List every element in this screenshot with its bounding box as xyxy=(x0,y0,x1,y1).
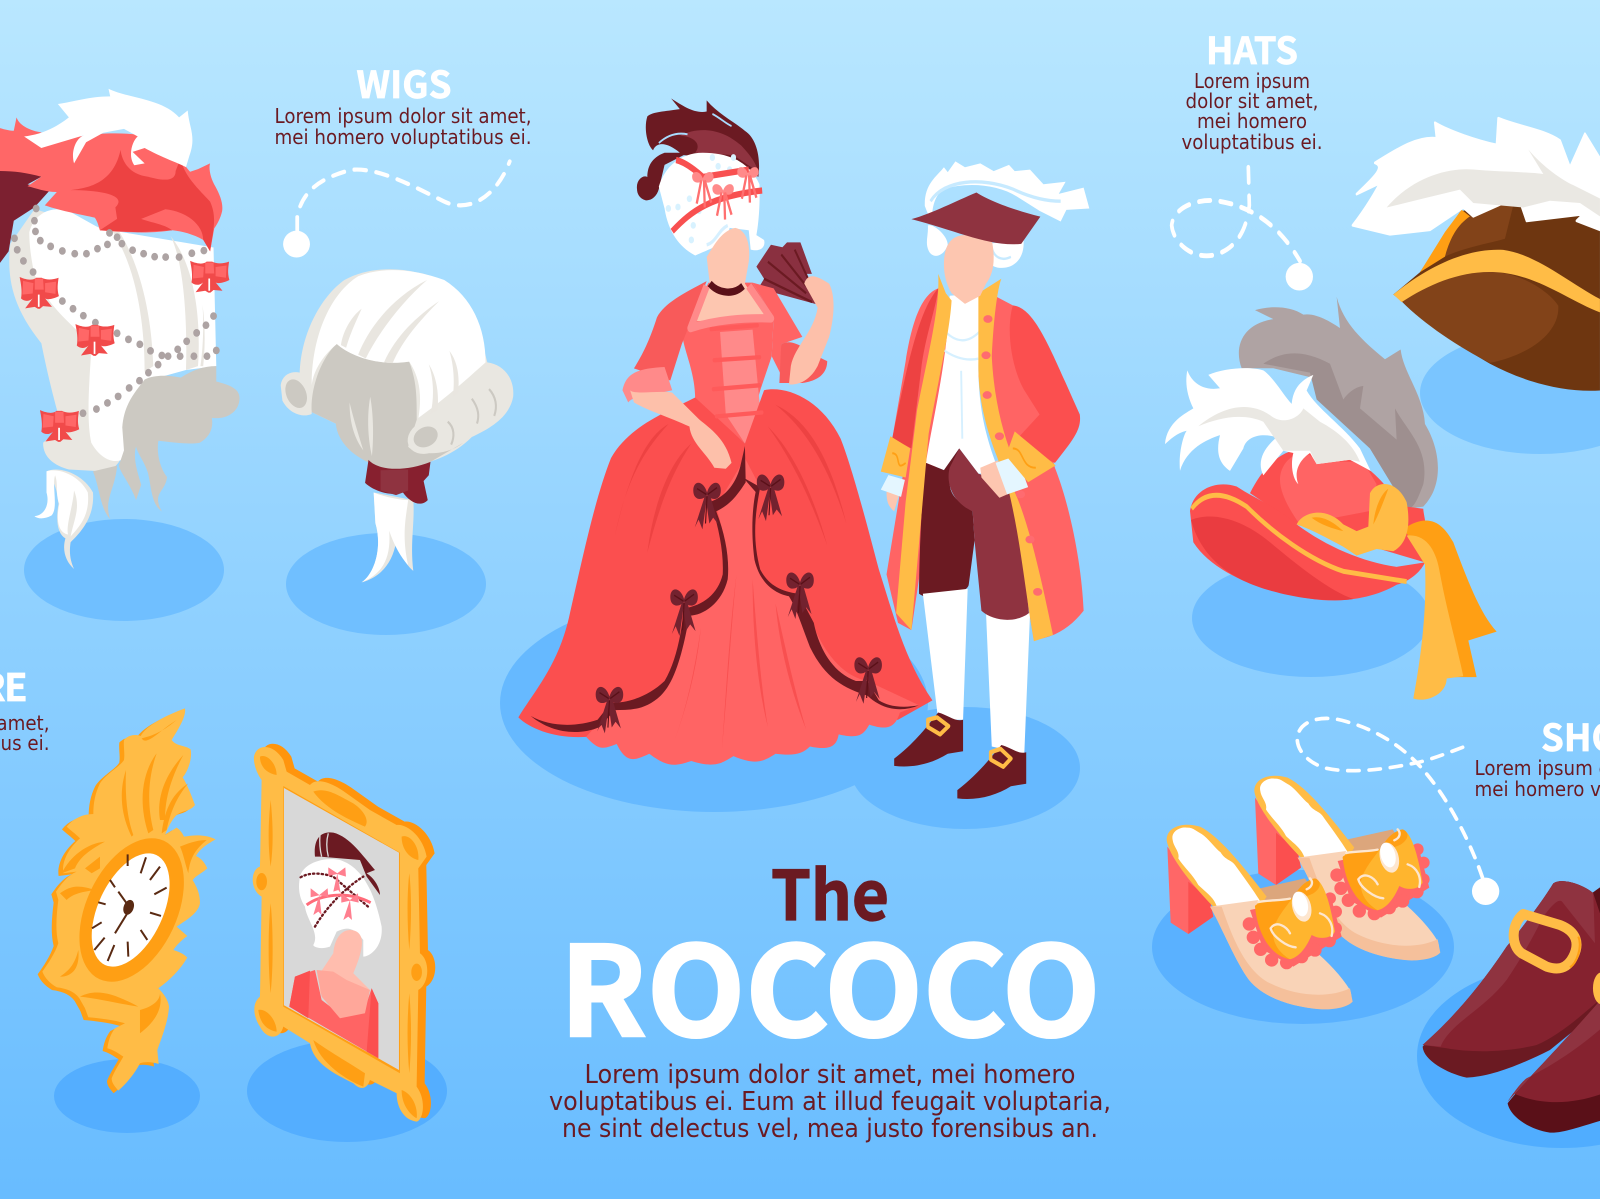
illustration: red plumed hat xyxy=(1165,297,1497,700)
panel: couple xyxy=(518,98,1089,799)
shadow: clock xyxy=(54,1059,200,1133)
connector dot: shoes xyxy=(1472,878,1499,905)
dashed connector: shoes xyxy=(1297,718,1483,880)
dashed connector: hats xyxy=(1172,167,1300,261)
panel: hats xyxy=(1165,118,1600,700)
shadow: red hat xyxy=(1192,559,1430,677)
title: The: The xyxy=(771,841,889,940)
shadow: man xyxy=(850,707,1080,829)
illustration: gilded clock xyxy=(38,708,216,1093)
illustration: ladies heeled shoes xyxy=(1167,776,1440,1009)
text: hats description xyxy=(1182,69,1322,154)
text: wigs description: mei homero voluptatibus ei. xyxy=(274,125,532,149)
text: intro paragraph: Lorem ipsum dolor sit amet, mei homero xyxy=(584,1060,1076,1090)
connector dot: wigs xyxy=(283,231,310,257)
illustration: powdered wig with bow xyxy=(281,269,513,582)
shadow: wig two xyxy=(286,533,486,635)
text: hats description: mei homero xyxy=(1197,109,1307,133)
illustration: woman in red gown xyxy=(518,98,932,765)
shadow: wig one xyxy=(24,519,224,621)
shadow: mens shoes xyxy=(1417,964,1600,1148)
text: wigs description xyxy=(274,104,532,149)
illustration: feathered wig xyxy=(0,89,240,569)
title: Rococo: ROCOCO xyxy=(560,892,1100,1072)
heading: hats: HATS xyxy=(1206,21,1298,75)
text: furniture description xyxy=(0,711,50,755)
text: intro paragraph: voluptatibus ei. Eum at illud feugait voluptaria, xyxy=(549,1087,1111,1117)
illustration: brown tricorn hat xyxy=(1353,118,1600,391)
text: intro paragraph: ne sint delectus vel, mea justo forensibus an. xyxy=(562,1114,1098,1144)
text: intro paragraph xyxy=(549,1060,1111,1144)
panel: furniture xyxy=(38,708,435,1122)
illustration: man in red coat xyxy=(881,161,1089,799)
dashed connector: wigs xyxy=(297,161,510,230)
shadow: portrait xyxy=(247,1040,447,1142)
text: shoes description xyxy=(1474,756,1600,801)
connector dot: hats xyxy=(1286,263,1313,291)
text: wigs description: Lorem ipsum dolor sit amet, xyxy=(274,104,532,128)
text: hats description: dolor sit amet, xyxy=(1186,89,1318,113)
panel: shoes xyxy=(1167,718,1600,1133)
shadow: ladies shoes xyxy=(1152,870,1454,1024)
heading: wigs: WIGS xyxy=(356,55,452,109)
panel: wigs xyxy=(0,89,513,582)
text: hats description: Lorem ipsum xyxy=(1194,69,1310,93)
text: hats description: voluptatibus ei. xyxy=(1182,130,1322,154)
portrait of a lady xyxy=(289,832,382,1058)
shadow: woman xyxy=(500,594,928,812)
title block xyxy=(549,841,1111,1144)
illustration: mens buckled shoes xyxy=(1423,881,1600,1133)
shadow: brown hat xyxy=(1420,332,1600,454)
illustration: gilded portrait frame xyxy=(253,744,435,1122)
